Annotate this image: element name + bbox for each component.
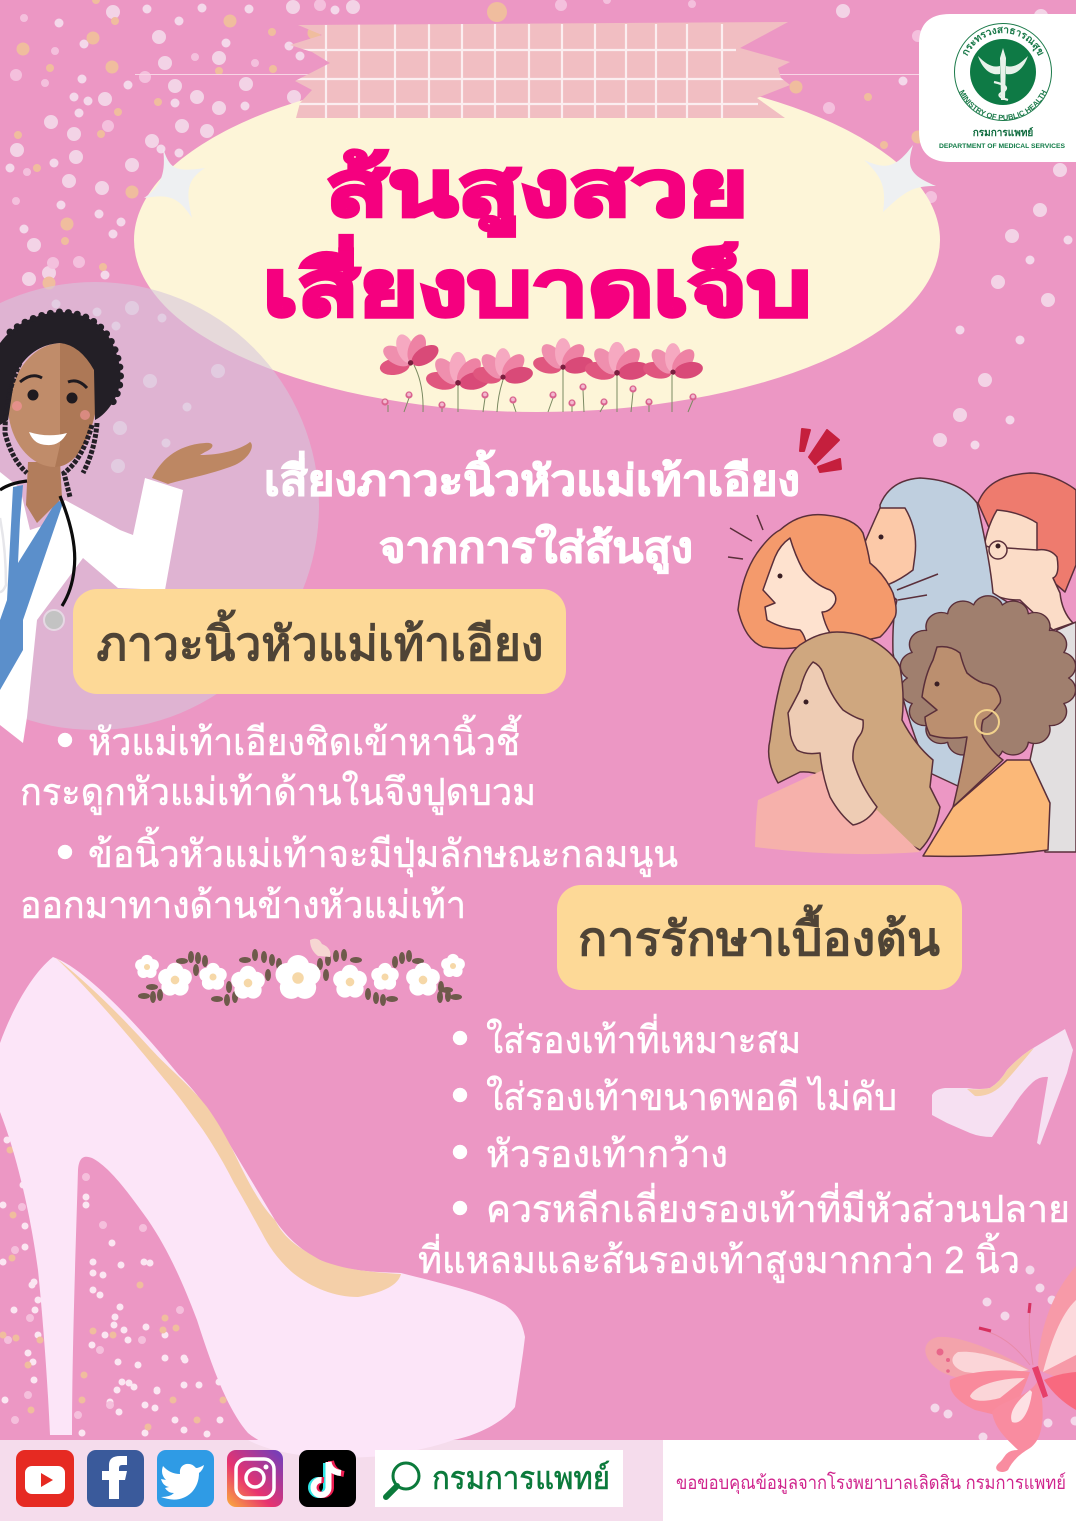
- symptom list: หัวแม่เท้าเอียงชิดเข้าหานิ้วชี้: [88, 714, 522, 764]
- woman: afro hair: [900, 596, 1076, 760]
- glasses: [983, 541, 1037, 559]
- doctor curly hair edge: [10, 312, 120, 402]
- icon: instagram: [227, 1450, 283, 1507]
- heading box: first aid: [557, 885, 962, 990]
- heading box: bunion: [73, 589, 566, 694]
- small high heel shoe: [932, 1029, 1073, 1145]
- subtitle: [264, 449, 800, 574]
- heading box: bunion: ภาวะนิ้วหัวแม่เท้าเอียง: [96, 609, 544, 670]
- footer white panel: [663, 1440, 1076, 1521]
- woman: long blonde hair: [769, 632, 940, 850]
- doctor neck: [26, 462, 62, 523]
- upper wing left: [925, 1337, 1030, 1380]
- lower wing left: [950, 1370, 1030, 1417]
- doctor braids: [5, 363, 97, 497]
- earring: [975, 710, 999, 734]
- subtitle: จากการใส่ส้นสูง: [379, 523, 693, 574]
- heading box: first aid: การรักษาเบื้องต้น: [578, 904, 940, 965]
- treatment list: ใส่รองเท้าที่เหมาะสม: [486, 1014, 801, 1062]
- logo card: MINISTRY OF PUBLIC HEALTH: [960, 90, 1046, 120]
- treatment list: ใส่รองเท้าขนาดพอดี ไม่คับ: [486, 1076, 897, 1119]
- icon: youtube: [16, 1450, 74, 1507]
- group of women illustration: [728, 473, 1076, 856]
- red emphasis burst: [800, 429, 841, 472]
- doctor coat: [0, 472, 183, 743]
- treatment list: ควรหลีกเลี่ยงรองเท้าที่มีหัวส่วนปลาย: [486, 1183, 1070, 1231]
- woman: short red hair: [978, 473, 1076, 592]
- title: ส้นสูงสวย: [326, 147, 748, 236]
- wing spots: [936, 1348, 950, 1373]
- treatment list: [418, 1014, 1070, 1283]
- floral garland: [135, 939, 465, 1006]
- antennae: [983, 1310, 1033, 1365]
- orange hair face: [763, 538, 836, 647]
- icon: twitter: [157, 1450, 214, 1507]
- sparkle star right: [864, 145, 936, 212]
- tail with drop: [992, 1380, 1043, 1472]
- faint horizontal line: [135, 74, 920, 76]
- symptom list: กระดูกหัวแม่เท้าด้านในจึงปูดบวม: [20, 771, 536, 815]
- icon: facebook: [87, 1450, 144, 1507]
- doctor hair: [0, 312, 120, 425]
- woman: orange hair: [738, 515, 896, 648]
- watercolor flowers row: [370, 324, 704, 412]
- social icons: [16, 1450, 356, 1507]
- woman: hijab: [880, 478, 1020, 787]
- stethoscope tube: [0, 518, 6, 592]
- afro woman face: [922, 647, 1003, 807]
- symptom list: ข้อนิ้วหัวแม่เท้าจะมีปุ่มลักษณะกลมนูน: [88, 826, 678, 877]
- large high heel shoe: [0, 957, 525, 1458]
- stethoscope: [0, 481, 75, 606]
- woman: face with glasses: [983, 510, 1073, 630]
- symptom list: [20, 714, 678, 927]
- treatment list: หัวรองเท้ากว้าง: [486, 1134, 728, 1176]
- logo card: กระทรวงสาธารณสุข: [963, 26, 1044, 56]
- title: เสี่ยงบาดเจ็บ: [263, 235, 811, 332]
- blonde shirt: [755, 770, 920, 854]
- icon: tiktok: [299, 1450, 356, 1507]
- search label: [375, 1450, 623, 1507]
- symptom list: ออกมาทางด้านข้างหัวแม่เท้า: [20, 885, 466, 927]
- shoe insole: [55, 957, 401, 1297]
- washi tape with grid: [290, 22, 790, 118]
- subtitle: เสี่ยงภาวะนิ้วหัวแม่เท้าเอียง: [264, 449, 800, 504]
- butterfly: [925, 1266, 1076, 1472]
- butterfly body: [1032, 1366, 1048, 1398]
- doctor face: [8, 343, 98, 467]
- hijab face: [862, 508, 916, 586]
- cream title ellipse: [134, 68, 940, 412]
- blonde face: [788, 662, 877, 825]
- title: [263, 147, 811, 332]
- afro woman shirt: [923, 760, 1050, 856]
- stethoscope head: [44, 610, 64, 630]
- treatment list: ที่แหลมและส้นรองเท้าสูงมากกว่า 2 นิ้ว: [418, 1232, 1020, 1283]
- doctor hand: [152, 442, 252, 484]
- woman: grey shirt: [1030, 622, 1076, 852]
- expression lines: [728, 515, 763, 559]
- search label: กรมการแพทย์: [432, 1460, 610, 1496]
- doctor features: [12, 376, 90, 445]
- footer band: [0, 1440, 663, 1521]
- translucent circle behind doctor: [0, 282, 319, 730]
- doctor illustration: [0, 312, 252, 743]
- upper wing right: [1038, 1266, 1076, 1385]
- logo card: DEPARTMENT OF MEDICAL SERVICES: [939, 143, 1065, 150]
- doctor scrubs: [0, 485, 63, 690]
- logo card: กรมการแพทย์: [973, 127, 1033, 139]
- logo card: [919, 14, 1076, 162]
- sparkle star left: [144, 148, 205, 218]
- shoe sole overlap on footer: [248, 1440, 453, 1458]
- doctor face shadow: [55, 343, 98, 467]
